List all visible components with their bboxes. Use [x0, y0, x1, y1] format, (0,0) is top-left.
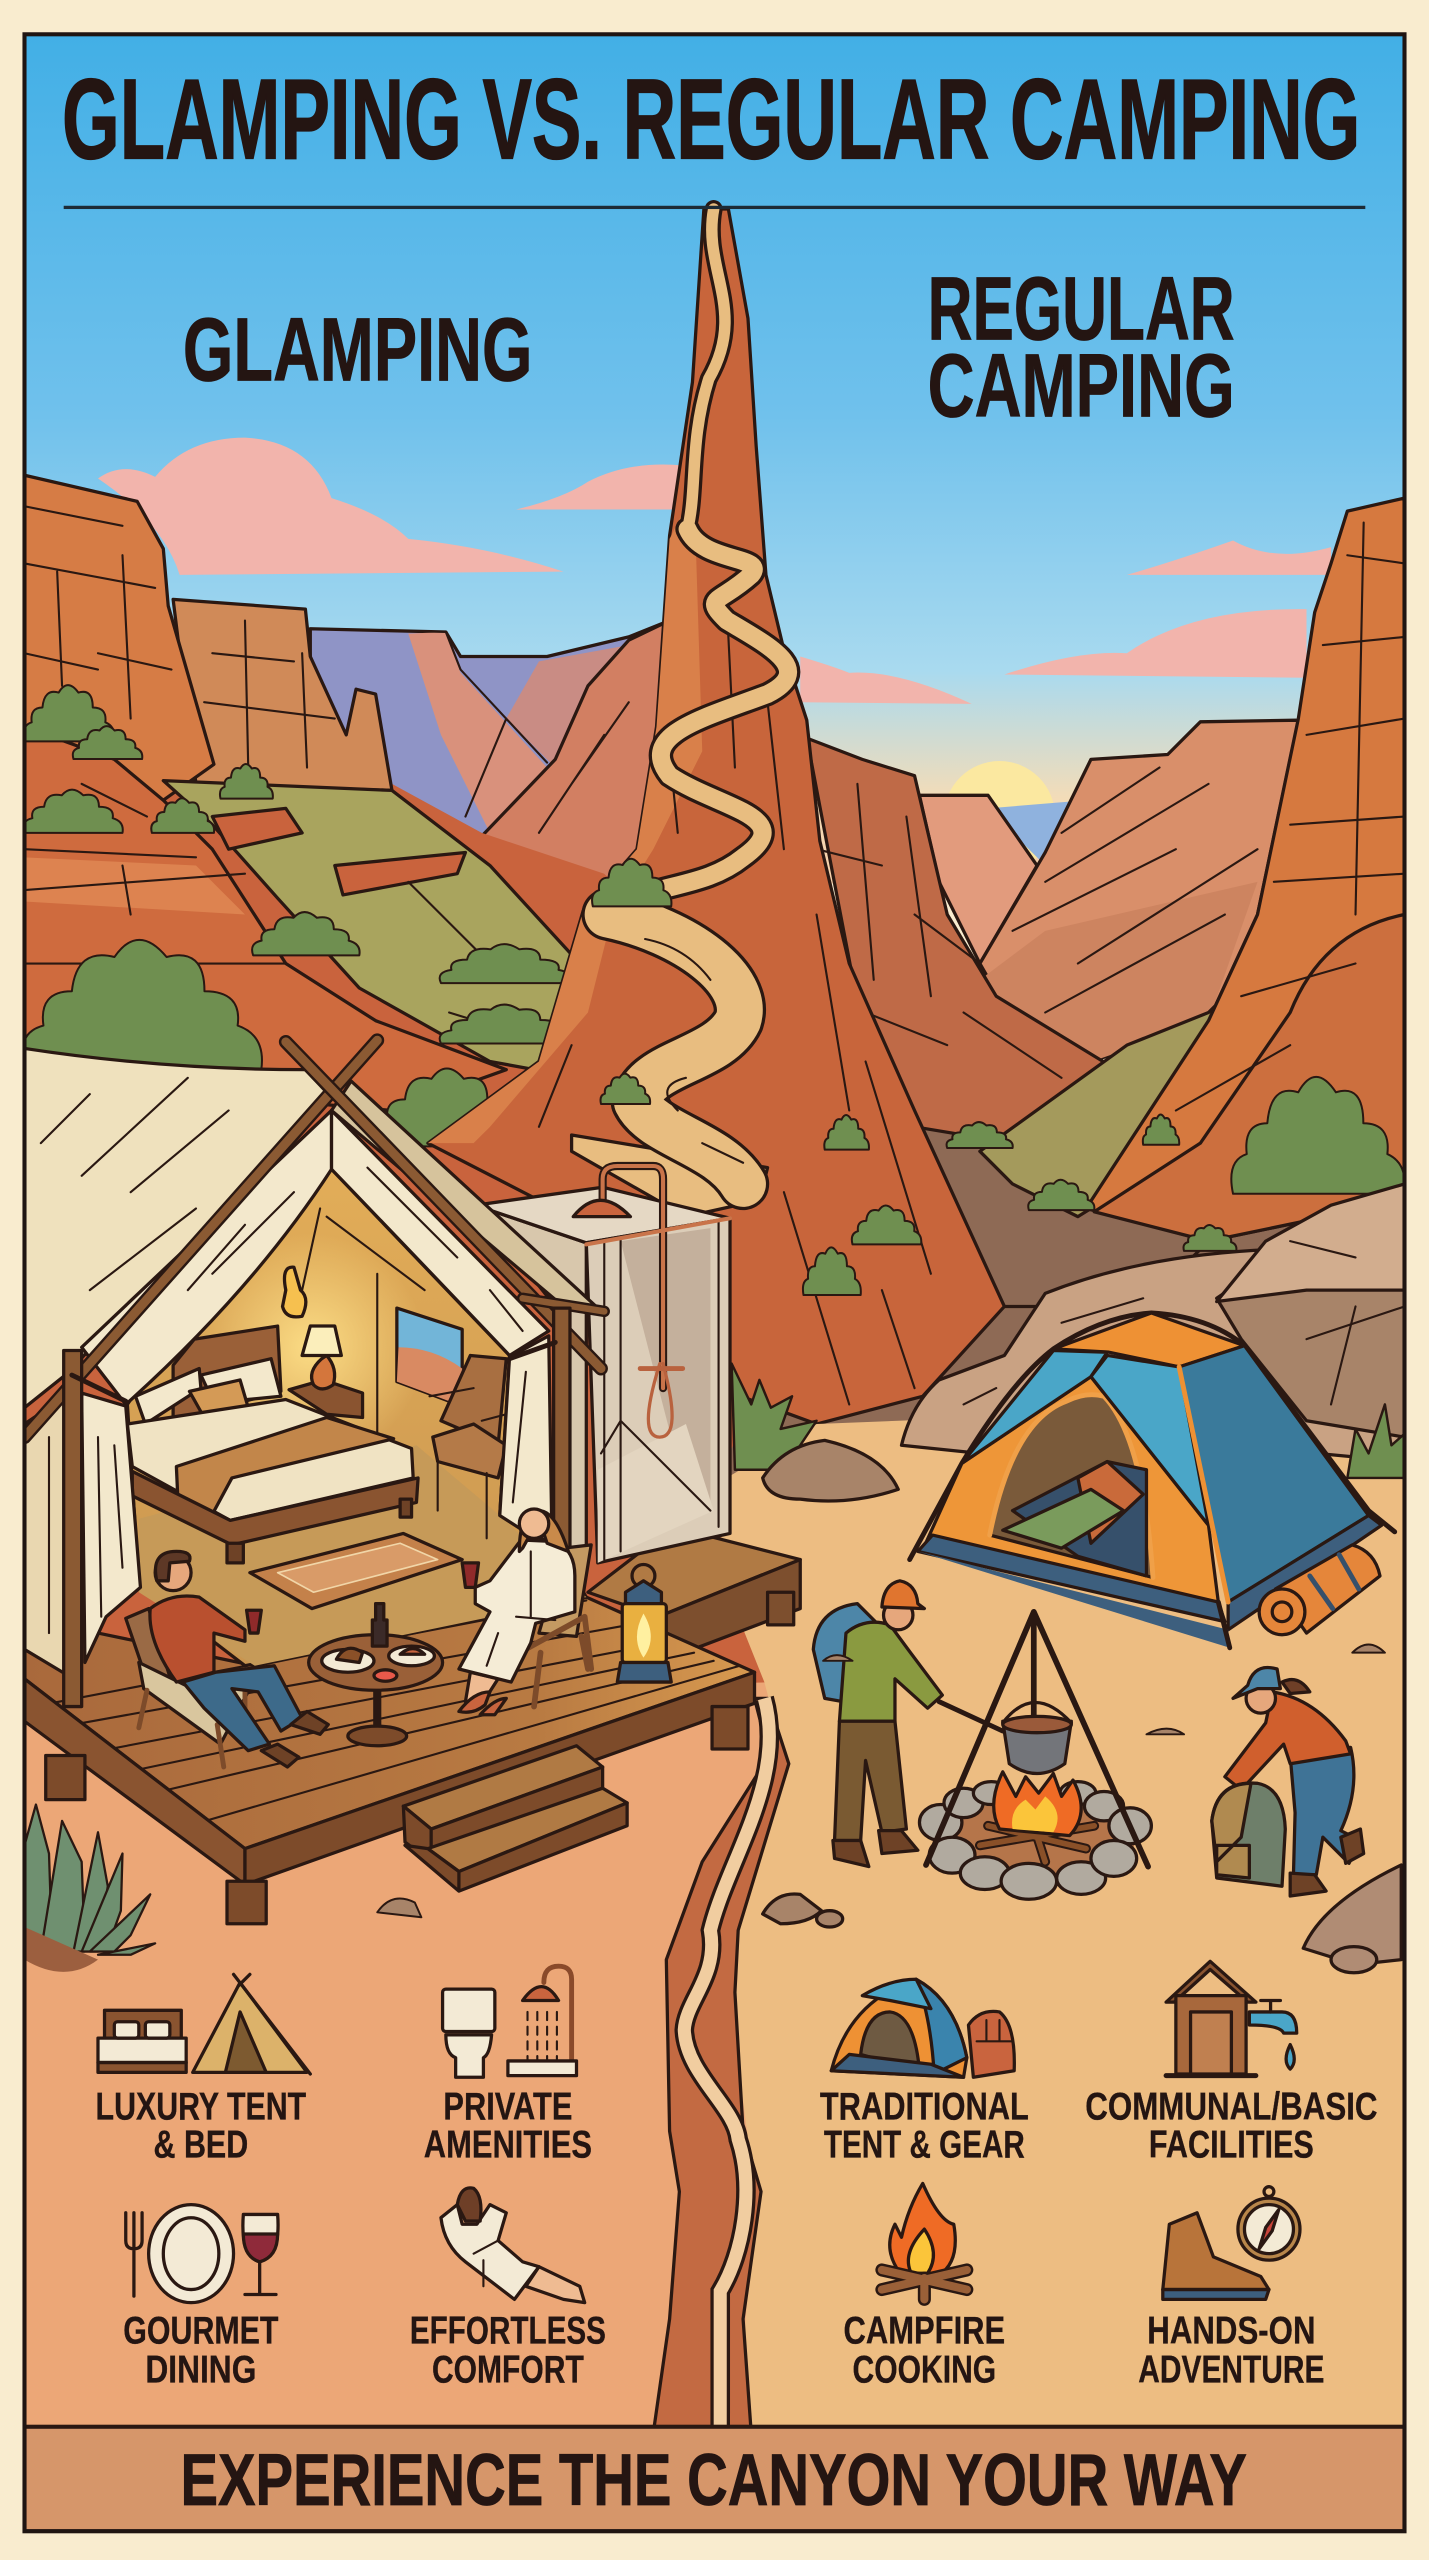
dining table: [309, 1604, 443, 1746]
label: luxury tent: LUXURY TENT: [96, 2086, 306, 2129]
tent right roof strip: [332, 1081, 596, 1306]
far blue mesas: [310, 621, 1298, 1078]
grass tufts right: [732, 1364, 1405, 1478]
label: adventure: ADVENTURE: [1138, 2349, 1324, 2392]
male camper cooking: [813, 1581, 1003, 1867]
label: and bed: & BED: [154, 2123, 248, 2166]
label: tent and gear: TENT & GEAR: [824, 2123, 1025, 2166]
heading: regular camping: CAMPING: [928, 336, 1235, 436]
label: private: PRIVATE: [443, 2086, 572, 2129]
bottom canyon divider: [653, 1698, 789, 2433]
glamping deck: [24, 1597, 755, 1924]
heading: regular camping: [928, 260, 1235, 436]
right drape: [332, 1110, 549, 1355]
heading: glamping: GLAMPING: [183, 301, 532, 401]
labels regular camping column: [820, 2086, 1378, 2392]
label: gourmet: GOURMET: [123, 2309, 278, 2352]
left cliffs and slopes: [24, 475, 580, 1110]
label: amenities: AMENITIES: [424, 2123, 592, 2166]
tripod and cooking pot: [926, 1612, 1148, 1867]
title rule: [64, 206, 1365, 209]
left tent wall: [26, 1405, 62, 1674]
rug: [250, 1533, 462, 1609]
fire flames: [994, 1772, 1081, 1836]
spire trail: [572, 209, 788, 1217]
tent roof canvas: [24, 1048, 332, 1408]
right terrain behind spire: [807, 498, 1405, 1306]
heading: regular camping: REGULAR: [928, 260, 1235, 360]
sun: [949, 761, 1054, 860]
left ground: [24, 1682, 784, 2433]
label: effortless: EFFORTLESS: [410, 2309, 606, 2352]
dome tent: [910, 1313, 1395, 1648]
icon: outhouse and faucet: [1166, 1961, 1297, 2076]
label: campfire: CAMPFIRE: [844, 2309, 1005, 2352]
nightstand and lamp: [289, 1326, 363, 1418]
bed: [127, 1326, 418, 1563]
campfire ring: [919, 1772, 1151, 1899]
agave plant: [24, 1805, 155, 1955]
right curtain: [500, 1336, 552, 1543]
right ground: [719, 1418, 1405, 2433]
boulders behind camp: [901, 1184, 1405, 1462]
icon: campfire: [882, 2183, 967, 2299]
left bushes: [22, 685, 572, 1146]
woman in bathrobe: [459, 1509, 591, 1715]
icon: fork plate wine: [126, 2205, 278, 2303]
icon: toilet and shower: [443, 1966, 576, 2077]
tent door: [990, 1395, 1153, 1578]
icon: bed and luxury tent: [98, 1974, 310, 2074]
tent poles: [24, 1040, 604, 1437]
armchair: [430, 1355, 506, 1538]
footer band: [24, 2427, 1405, 2531]
label: hands-on: HANDS-ON: [1147, 2309, 1315, 2352]
label: cooking: COOKING: [853, 2349, 996, 2392]
sky: [24, 34, 1405, 883]
terrain base fills: [26, 784, 1290, 1683]
shower deck: [586, 1537, 802, 1648]
deck steps: [403, 1746, 627, 1891]
labels glamping column: [96, 2086, 606, 2392]
man in red sweater: [126, 1551, 328, 1767]
tent blue wall: [1179, 1346, 1369, 1602]
glamping tent: [24, 1040, 604, 1707]
sleeping pad roll: [1259, 1545, 1380, 1635]
label: comfort: COMFORT: [432, 2349, 584, 2392]
icon: boot and compass: [1163, 2187, 1300, 2299]
small rock: [763, 1440, 898, 1501]
tent front: [923, 1377, 1218, 1602]
right bushes: [947, 1077, 1405, 1251]
left drape: [82, 1110, 332, 1404]
lantern: [617, 1564, 671, 1682]
spire shrubs: [592, 859, 921, 1295]
female camper packing: [1212, 1668, 1364, 1896]
tent blue flies: [962, 1351, 1107, 1463]
tent posts: [64, 1351, 82, 1707]
framed canyon picture: [397, 1308, 462, 1406]
label: dining: DINING: [145, 2349, 256, 2392]
central spire: [428, 209, 1004, 1424]
icon: relaxing woman in robe: [441, 2188, 585, 2303]
tent interior wall: [127, 1169, 586, 1666]
ground rocks right: [763, 1645, 1401, 1973]
left curtain: [82, 1393, 140, 1662]
tent skirt: [918, 1535, 1225, 1622]
ground pebbles left: [24, 1899, 421, 1972]
label: traditional: TRADITIONAL: [820, 2086, 1029, 2129]
wall sconce: [283, 1267, 306, 1317]
outdoor shower: [475, 1166, 730, 1563]
backpack: [1212, 1783, 1285, 1886]
clouds: [98, 438, 1331, 704]
icon: dome tent and backpack: [831, 1979, 1014, 2077]
tent floor: [139, 1445, 586, 1666]
tent orange top: [1053, 1313, 1244, 1367]
label: facilities: FACILITIES: [1149, 2123, 1314, 2166]
